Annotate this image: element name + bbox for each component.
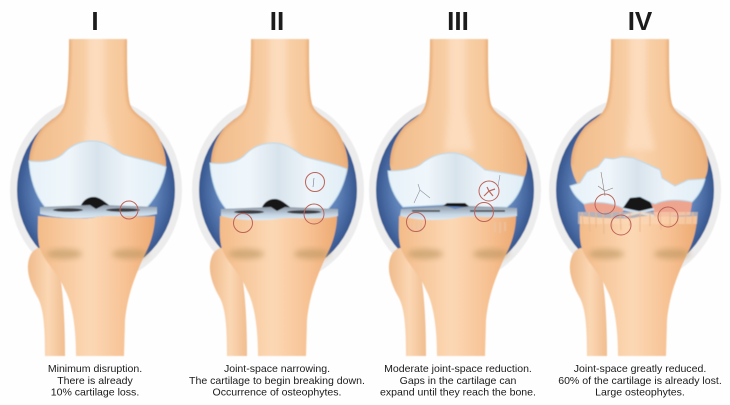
marker: cartilage damage [120, 201, 138, 219]
knee joint illustration I [10, 30, 182, 356]
caption II: The cartilage to begin breaking down. [189, 375, 365, 387]
caption II: Joint-space narrowing. [224, 363, 330, 375]
caption II: Occurrence of osteophytes. [213, 386, 341, 398]
panel: stage I [10, 6, 182, 398]
caption III: Gaps in the cartilage can [400, 375, 516, 387]
caption IV: Large osteophytes. [595, 386, 685, 398]
caption IV: 60% of the cartilage is already lost. [558, 375, 722, 387]
caption IV: Joint-space greatly reduced. [574, 363, 706, 375]
markers: damage sites [595, 194, 678, 235]
markers: damage sites [406, 181, 499, 232]
markers: damage sites [234, 172, 324, 232]
caption III: expand until they reach the bone. [380, 386, 536, 398]
panel: stage IV [549, 6, 722, 398]
panel: stage III [369, 6, 541, 398]
heading: I: I [91, 6, 99, 36]
caption I: 10% cartilage loss. [51, 386, 139, 398]
lesion [484, 187, 495, 196]
heading: III: III [447, 6, 469, 36]
heading: IV: IV [628, 6, 653, 36]
knee joint illustration II [192, 30, 364, 356]
cracks in cartilage [414, 175, 500, 203]
knee joint illustration III [369, 30, 541, 356]
heading: II: II [270, 6, 284, 36]
caption I: Minimum disruption. [48, 363, 142, 375]
knee joint illustration IV [549, 30, 721, 356]
cracks and lesion [598, 172, 613, 196]
caption I: There is already [57, 375, 134, 387]
crack in cartilage [313, 178, 314, 187]
panel: stage II [189, 6, 365, 398]
caption III: Moderate joint-space reduction. [384, 363, 532, 375]
